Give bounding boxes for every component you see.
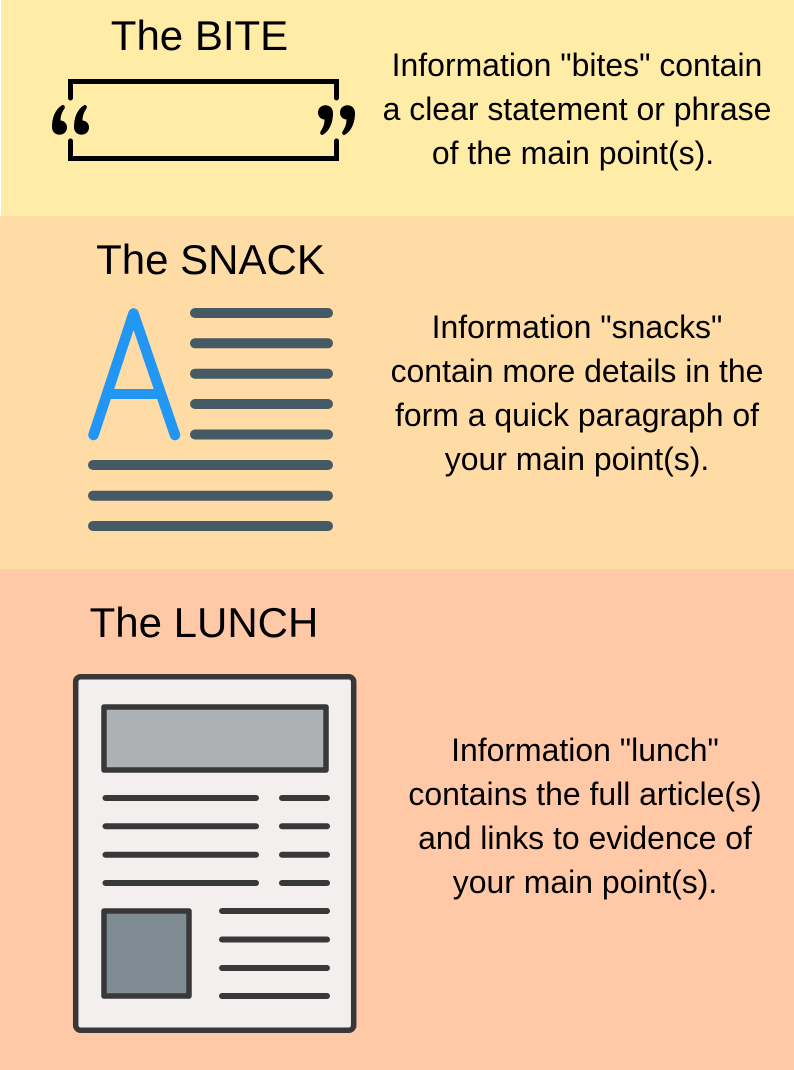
heading: the snack: The SNACK	[96, 236, 325, 283]
text: lunch description	[408, 732, 762, 900]
text: bite description: a clear statement or phrase	[383, 91, 771, 127]
icon: text document with letter A	[93, 313, 328, 526]
text: snack description	[391, 309, 763, 477]
text: snack description: form a quick paragraph of	[395, 397, 759, 433]
text: bite description	[383, 47, 771, 171]
icon: quotation box	[52, 82, 355, 158]
heading: the lunch: The LUNCH	[90, 599, 318, 646]
text: lunch description: and links to evidence of	[418, 820, 752, 856]
text: lunch description: Information "lunch"	[451, 732, 719, 768]
heading: the bite: The BITE	[111, 12, 288, 59]
panel: the snack	[0, 216, 794, 569]
text: snack description: your main point(s).	[445, 441, 709, 477]
text: bite description: Information "bites" contain	[392, 47, 762, 83]
panel: the lunch	[0, 569, 794, 1070]
text: snack description: contain more details in the	[391, 353, 763, 389]
text: bite description: of the main point(s).	[432, 135, 714, 171]
text: lunch description: contains the full article(s)	[408, 776, 762, 812]
panel: the bite	[1, 0, 794, 216]
text: snack description: Information "snacks"	[432, 309, 722, 345]
text: lunch description: your main point(s).	[453, 864, 717, 900]
icon: newspaper	[76, 677, 354, 1030]
